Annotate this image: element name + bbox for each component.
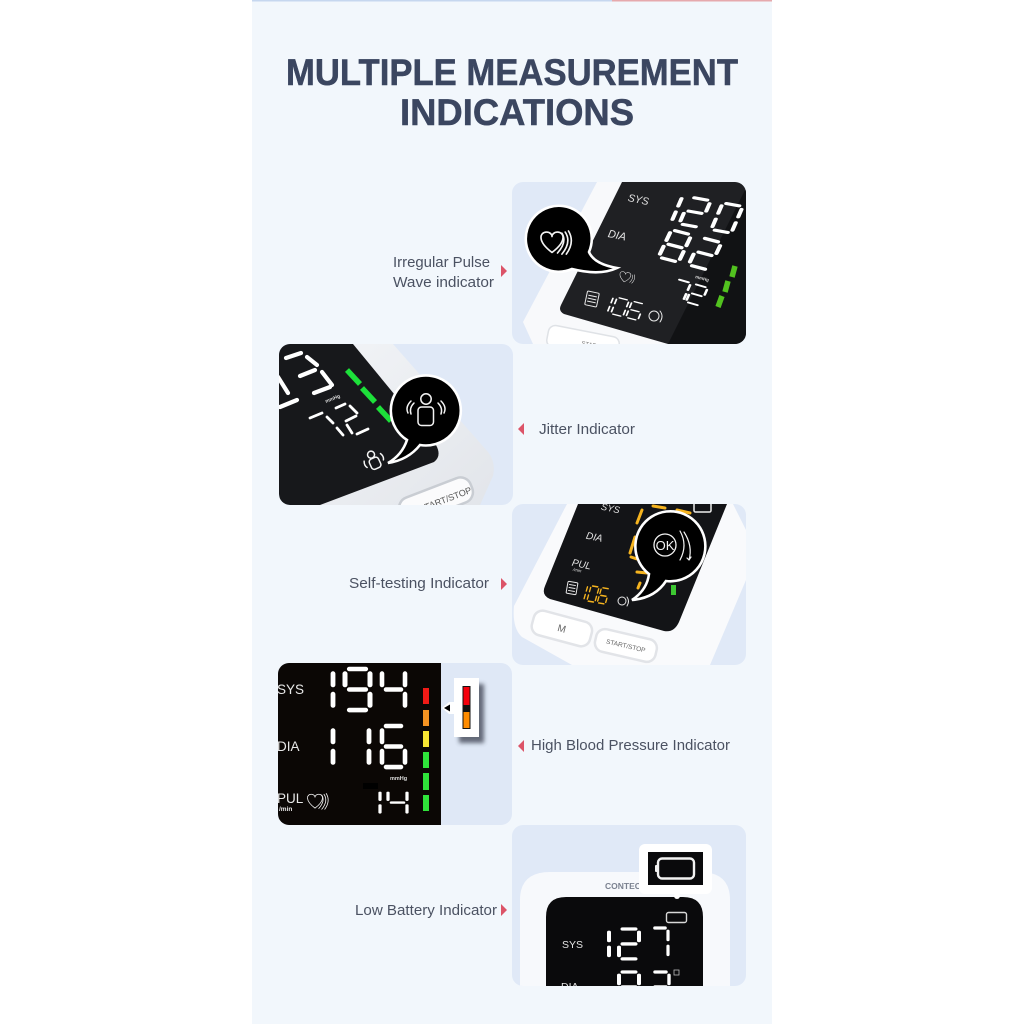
mmHg label: mmHg xyxy=(695,274,710,283)
green indicator bars xyxy=(718,266,735,307)
button START/STOP: START/STOP xyxy=(605,639,646,654)
green bar xyxy=(671,585,676,595)
panel: irregular pulse wave xyxy=(512,182,746,360)
PUL label: PUL xyxy=(571,558,592,572)
device button xyxy=(546,324,620,344)
icon: small OK xyxy=(649,311,662,322)
button label: START/STOP xyxy=(418,485,473,514)
device body xyxy=(514,504,746,665)
icon: battery xyxy=(694,503,711,512)
icon: calendar xyxy=(585,291,599,307)
device body xyxy=(320,344,494,505)
button M xyxy=(530,609,594,648)
digits: 120 xyxy=(671,196,743,233)
speech bubble: OK xyxy=(632,511,705,600)
panel background xyxy=(512,182,597,344)
min label: /min xyxy=(572,567,582,574)
screen xyxy=(546,897,703,992)
page column background xyxy=(252,0,772,1024)
digits: 116 xyxy=(333,726,405,767)
icon: calendar xyxy=(566,581,578,595)
icon: small person xyxy=(363,450,384,470)
arrow: jitter xyxy=(518,423,524,435)
arrow: self-testing xyxy=(501,578,507,590)
panel background xyxy=(393,344,513,505)
title xyxy=(286,52,738,133)
title: MULTIPLE MEASUREMENT xyxy=(286,52,738,93)
SYS label: SYS xyxy=(600,502,621,517)
icon: heart xyxy=(307,794,328,809)
digits: 194 xyxy=(333,669,405,710)
label: self-testing: Self-testing Indicator xyxy=(349,575,489,592)
mmHg label: mmHg xyxy=(325,393,341,405)
panel: low battery xyxy=(512,825,746,1002)
digits: partial second reading xyxy=(619,972,669,1002)
digits: 82 xyxy=(659,230,721,270)
digits: 127 xyxy=(609,928,668,959)
bubble OK icon: OK xyxy=(656,538,675,553)
label: jitter: Jitter Indicator xyxy=(539,421,635,438)
DIA label: DIA xyxy=(585,531,604,545)
arrow: low battery xyxy=(501,904,507,916)
screen xyxy=(560,182,746,344)
panel: self-testing xyxy=(512,502,746,665)
title: INDICATIONS xyxy=(400,92,634,133)
panel background xyxy=(512,504,746,665)
SYS label: SYS xyxy=(277,682,304,697)
green indicator bars xyxy=(347,370,391,421)
digits: partial reading xyxy=(278,353,332,407)
bubble person icon xyxy=(407,394,445,426)
level bars xyxy=(423,688,429,811)
label: low battery: Low Battery Indicator xyxy=(355,902,497,919)
DIA label: DIA xyxy=(277,739,300,754)
min label: /min xyxy=(279,806,292,813)
digits: 14 xyxy=(380,793,407,812)
screen xyxy=(279,344,439,505)
button START/STOP xyxy=(593,627,659,664)
speech bubble: heart xyxy=(526,206,617,272)
screen xyxy=(544,504,727,631)
digits: 72 xyxy=(671,280,708,306)
arrow: irregular pulse xyxy=(501,265,507,277)
brand name: CONTEC xyxy=(605,881,641,891)
SYS label: SYS xyxy=(627,192,650,208)
digits: 106 xyxy=(607,296,644,320)
button label: START xyxy=(581,341,601,351)
digits: 12 xyxy=(310,404,368,435)
small battery icon xyxy=(666,912,686,922)
callout: battery zoom xyxy=(639,844,712,899)
panel background xyxy=(512,825,746,986)
DIA label: DIA xyxy=(607,228,627,244)
panel: high blood pressure xyxy=(277,663,512,825)
SYS label: SYS xyxy=(562,939,583,951)
speech bubble: person xyxy=(388,375,461,463)
label: irregular pulse xyxy=(393,254,494,291)
screen gloss xyxy=(668,190,746,344)
label: high blood pressure: High Blood Pressure Indicator xyxy=(531,737,730,754)
bubble heart icon xyxy=(541,231,571,254)
arrow: high blood pressure xyxy=(518,740,524,752)
digits: 106 yellow xyxy=(584,585,610,604)
mmHg icon xyxy=(674,970,679,975)
DIA label: DIA xyxy=(561,981,579,993)
panel background xyxy=(278,663,512,825)
label: irregular pulse: Irregular Pulse xyxy=(393,254,490,271)
PUL label: PUL xyxy=(277,791,304,806)
button M: M xyxy=(556,623,567,636)
icon: small heart xyxy=(619,271,635,284)
blanked segment xyxy=(363,783,378,789)
yellow reading segments xyxy=(630,506,690,588)
label: irregular pulse: Wave indicator xyxy=(393,274,494,291)
device body xyxy=(523,182,668,344)
device body xyxy=(520,872,730,986)
callout: level zoom xyxy=(442,678,484,743)
screen xyxy=(278,663,441,825)
icon: small OK xyxy=(618,597,628,606)
device button xyxy=(398,476,474,505)
panel: jitter xyxy=(279,344,513,505)
top edge strip xyxy=(252,0,772,2)
mmHg label: mmHg xyxy=(390,776,407,782)
